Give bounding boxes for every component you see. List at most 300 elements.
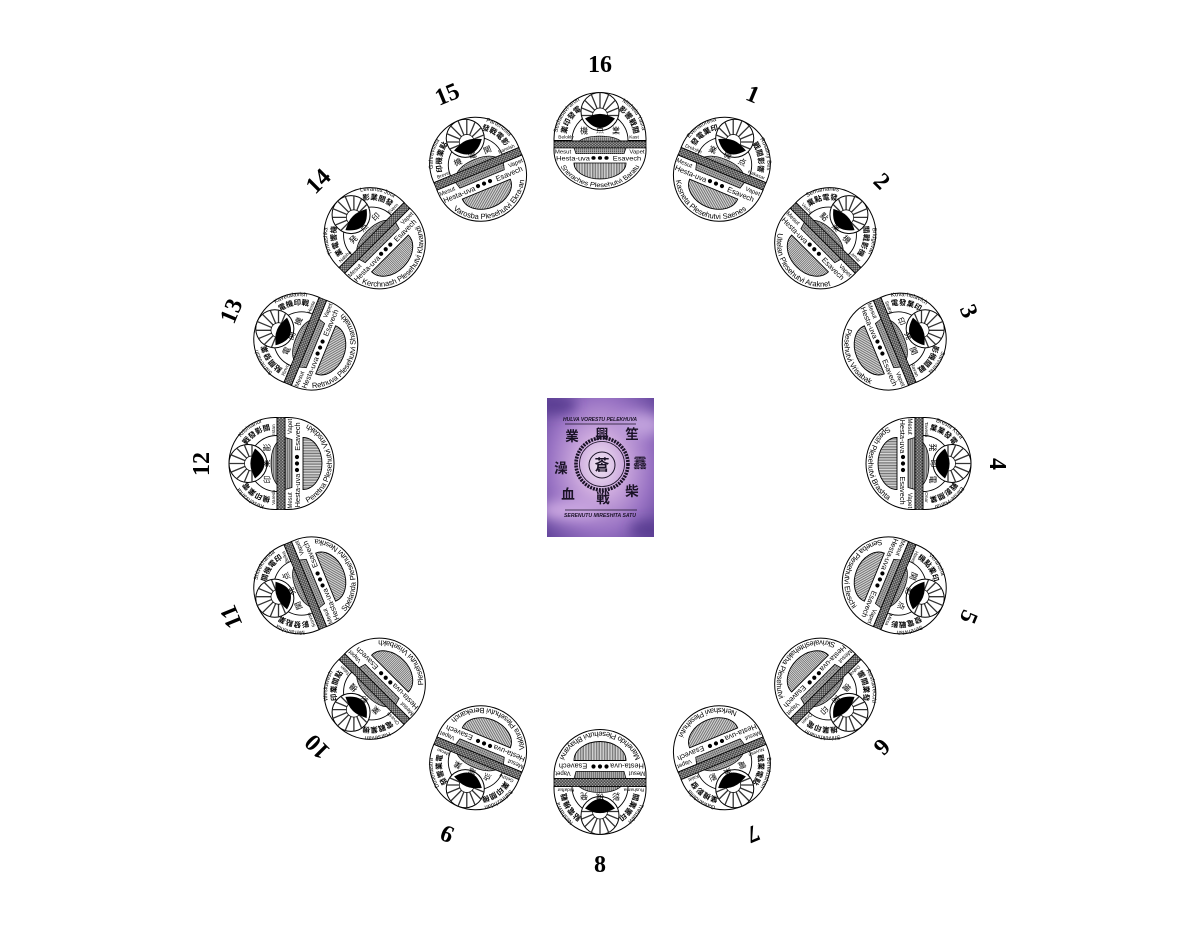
number 8: 8: [594, 852, 606, 878]
disc 11 upper half: 関: [293, 600, 305, 611]
disc 6 lower half: Esavech: [782, 683, 808, 710]
disc 4 upper half: Onar: [923, 492, 929, 503]
disc 11 lower half: Vapet: [295, 539, 306, 556]
disc 14 upper half: [293, 156, 404, 268]
disc 10 upper half: 印業關點: [317, 667, 356, 706]
disc 13 upper half: [224, 272, 319, 382]
disc 7 upper half: 戰業電點: [752, 754, 765, 786]
disc 4 lower half: Hesta-uva: [898, 420, 907, 454]
number 4: 4: [984, 458, 1010, 470]
disc 14 upper half: Nalsha: [338, 249, 353, 264]
disc 2 upper half: 關戰影機: [856, 226, 870, 257]
disc 7 lower half: Esavech: [676, 744, 706, 763]
disc 8 lower half: Manehdo Plesehutvi Bhayanvi: [558, 730, 642, 762]
disc 15 upper half: [409, 87, 519, 183]
disc 4 upper half: 業業發電: [930, 424, 958, 444]
number 6: 6: [868, 733, 895, 760]
disc 6 lower half: [774, 638, 862, 725]
disc 10 lower half: Vapet: [348, 648, 363, 663]
disc 14 lower half: Hesta-uva: [352, 253, 383, 284]
disc 6 upper half: 響關業發: [857, 670, 870, 701]
disc 11 upper half: 關機電印: [252, 552, 290, 585]
number 9: 9: [437, 819, 458, 847]
disc 14 upper half: 影業關發: [358, 180, 397, 219]
disc 6 lower half: Hesta-uva: [817, 643, 848, 674]
disc 11 lower half: Spelanda Plesehutvi Nesrika: [310, 527, 370, 615]
disc 10 lower half: [338, 638, 426, 725]
central purple emblem picture: HULVA VORESTU PELEKHUVA: [563, 417, 637, 423]
disc 1 lower half: Esavech: [726, 185, 756, 204]
disc 14 lower half: Vapet: [400, 211, 415, 226]
number 12: 12: [189, 452, 215, 476]
disc 6: [774, 638, 877, 740]
disc 11 lower half: [284, 536, 358, 630]
disc 8 upper half: [554, 786, 646, 835]
disc 11 lower half: Esavech: [301, 540, 320, 569]
disc 12 upper half: 機印業電: [240, 480, 271, 504]
disc 15 upper half: 印機業點: [425, 138, 459, 175]
disc 7 upper half: 影: [707, 771, 718, 783]
disc 1 upper half: 發電業印: [690, 124, 718, 146]
disc 2 upper half: Lamar: [848, 250, 862, 264]
disc 10 upper half: 影: [357, 693, 370, 706]
disc 3 upper half: [880, 292, 947, 383]
disc 12 upper half: 影: [262, 444, 272, 452]
disc 5 lower half: [842, 536, 916, 630]
disc 8 upper half: Neshavra: [555, 801, 575, 825]
disc 7 lower half: [672, 705, 767, 780]
disc 9 upper half: 業: [452, 759, 463, 771]
disc 10 upper half: Orvesh: [386, 710, 401, 726]
disc 3 upper half: 発: [902, 330, 914, 341]
disc 8 lower half: Mesut: [628, 770, 645, 776]
disc 10 lower half: Mesut: [400, 700, 416, 716]
disc 6 upper half: 関: [830, 693, 842, 705]
disc 13 upper half: Kavetalavish: [272, 282, 309, 315]
disc 12 lower half: Vapet: [288, 419, 294, 434]
disc 1 upper half: Hakasar: [747, 169, 766, 182]
disc 6 upper half: Reshavecchi: [866, 668, 877, 703]
number 3: 3: [954, 301, 982, 322]
disc 2 lower half: Ultelan Plesehutvi Araknet: [776, 234, 831, 287]
disc 16 upper half: 業印發電: [560, 106, 581, 134]
disc 11 upper half: 点: [281, 571, 292, 581]
disc 3 upper half: 影機關戰: [918, 346, 940, 374]
disc 8 upper half: 発: [580, 792, 588, 800]
number 14: 14: [301, 164, 336, 199]
disc 14 lower half: [335, 198, 444, 308]
disc 14 upper half: Tirmashka: [312, 224, 345, 257]
disc 16 upper half: Seshasavi-aron: [554, 98, 580, 132]
disc 2 upper half: 業點電發: [806, 194, 838, 207]
disc 3 lower half: [842, 296, 916, 391]
disc 13: [253, 292, 358, 391]
disc 3 upper half: Sedra: [883, 300, 894, 315]
disc 7 upper half: 業機影發: [690, 781, 718, 803]
disc 5 lower half: Seneba Plesehutvi Eleschi: [844, 540, 882, 609]
disc 4 lower half: Esavech: [898, 476, 907, 505]
number 11: 11: [216, 601, 248, 632]
disc 4 lower half: Vapet: [906, 493, 912, 508]
disc 11: [253, 536, 358, 635]
disc 1 upper half: Evenatoresa: [686, 118, 716, 138]
disc 9 upper half: 点: [482, 771, 493, 782]
disc 5 upper half: Mirsa: [883, 613, 893, 627]
disc 8 lower half: Hesta-uva: [609, 762, 644, 770]
disc 4 lower half: Mesut: [906, 418, 912, 435]
disc 16: [554, 92, 646, 190]
disc 10 upper half: [323, 658, 405, 740]
disc 13 lower half: Esavech: [321, 308, 340, 338]
disc 1 upper half: 機: [722, 149, 733, 161]
disc 6 lower half: Skrivaleshtehakha Plesehutvi: [776, 640, 836, 699]
disc 16 upper half: 業: [612, 126, 620, 136]
disc 16 upper half: Mishelu Yasra: [622, 98, 644, 130]
disc 16 upper half: 機: [580, 126, 588, 136]
disc 16 lower half: [554, 136, 646, 190]
disc 9 upper half: Meran: [436, 746, 451, 757]
disc 12 upper half: Krishtanor: [238, 419, 263, 439]
disc 15 lower half: Hesta-uva: [442, 183, 477, 205]
disc 5 upper half: Hanel: [909, 550, 919, 564]
disc 2 lower half: Hesta-uva: [780, 215, 811, 246]
disc 4 lower half: Spesh Plesehutvi Brashta: [868, 428, 890, 500]
disc 5 lower half: Mesut: [894, 539, 906, 557]
disc 5 lower half: Vapet: [865, 608, 877, 624]
central purple emblem picture: 血: [561, 486, 575, 502]
disc 5 upper half: [880, 544, 947, 635]
disc 10 upper half: 機: [347, 681, 360, 694]
disc 11 upper half: Meravishta: [273, 614, 307, 644]
central purple emblem picture: 澡: [554, 461, 568, 476]
disc 2 upper half: Vesha: [800, 202, 814, 216]
disc 16 upper half: Belokly: [558, 134, 574, 140]
disc 13 upper half: Rinvo: [281, 363, 291, 377]
disc 12 lower half: Hesta-uva: [293, 473, 302, 507]
disc 7: [672, 705, 772, 810]
disc 11 lower half: Hesta-uva: [320, 586, 341, 622]
disc 16 upper half: 点: [596, 126, 604, 134]
disc 7 upper half: Berekushan: [760, 758, 772, 788]
disc 3 upper half: 電發業印: [891, 298, 922, 310]
disc 1 lower half: Mesut: [675, 158, 693, 170]
number 15: 15: [431, 78, 463, 112]
disc 13 lower half: Vapet: [323, 303, 335, 319]
disc 16 upper half: [554, 92, 646, 141]
disc 1 lower half: [672, 147, 767, 222]
disc 13 upper half: Sarnevash: [248, 347, 280, 376]
number 5: 5: [954, 606, 982, 627]
central purple emblem picture: 業: [565, 429, 579, 444]
disc 3 lower half: Esavech: [880, 358, 899, 387]
disc 5: [842, 536, 947, 635]
disc 1 lower half: Hesta-uva: [674, 163, 709, 185]
disc 14 upper half: 点: [358, 222, 370, 234]
disc 4 upper half: 印: [929, 460, 938, 468]
disc 8 upper half: 點電機戰: [559, 792, 583, 823]
disc 14 lower half: Mesut: [347, 263, 363, 279]
disc 14 upper half: 発: [348, 234, 360, 246]
disc 7 upper half: Nuvesh: [747, 746, 765, 758]
disc 12 upper half: 戰發影關: [241, 423, 271, 446]
disc 5 upper half: Verahsha: [930, 552, 944, 576]
central purple emblem picture: 興: [595, 427, 609, 442]
disc 15 lower half: Vapet: [508, 158, 524, 170]
disc 16 lower half: Sneraches Plesehutvi Baratu: [561, 165, 640, 188]
number 10: 10: [300, 729, 335, 764]
disc 5 lower half: Hesta-uva: [879, 537, 900, 572]
disc 4 lower half: [866, 417, 930, 510]
disc 12 upper half: Kesehvarita: [236, 486, 265, 509]
disc 9 lower half: Hesta-uva: [491, 742, 526, 764]
disc 12 lower half: Mesut: [288, 492, 294, 509]
disc 15 lower half: Esavech: [494, 164, 524, 183]
number 7: 7: [742, 819, 763, 847]
disc 7 upper half: Gawandelia: [688, 790, 715, 810]
disc 13 lower half: Retnuva Plesehutvi Sharmakh: [309, 310, 370, 401]
disc 12 lower half: Peretna Plesehutvi Vinsdakh: [304, 422, 334, 505]
disc 9 upper half: 發響業電: [425, 751, 459, 789]
disc 5 upper half: Serehvish: [896, 626, 923, 635]
disc 6 upper half: [795, 658, 877, 740]
disc 2 upper half: Semamanes: [806, 188, 839, 196]
disc 8: [554, 729, 646, 835]
disc 8 upper half: Nidaftar: [557, 786, 574, 792]
disc 8 lower half: [554, 729, 646, 793]
disc 9: [428, 705, 528, 810]
disc 14 upper half: Evern: [387, 202, 400, 215]
disc 13 upper half: 電機印戰: [275, 288, 312, 322]
disc 2 upper half: 機: [840, 233, 853, 246]
disc 10 upper half: Talan: [339, 664, 352, 676]
disc 13 upper half: 機: [292, 316, 305, 327]
disc 12 lower half: Esavech: [293, 422, 302, 451]
disc 4 upper half: Eleste-Hanar: [935, 486, 964, 508]
disc 6 upper half: 印: [818, 704, 830, 716]
disc 15 upper half: Partenusia: [484, 111, 513, 144]
disc 3 lower half: Hesta-uva: [859, 305, 880, 341]
disc 13 upper half: 電: [281, 346, 292, 356]
disc 12 upper half: [228, 417, 278, 510]
disc 16 upper half: Kast: [629, 134, 639, 140]
disc 9 lower half: Esavech: [444, 723, 474, 742]
disc 10 upper half: Harsevan: [362, 720, 393, 751]
disc 13 upper half: Hesta: [307, 300, 317, 314]
disc 11 upper half: 影發點業: [274, 605, 312, 639]
disc 10 lower half: Hesta-uva: [389, 681, 420, 712]
disc 15 lower half: Mesut: [439, 186, 457, 198]
disc 1: [672, 116, 772, 222]
disc 13 upper half: 點關發業: [252, 341, 290, 375]
disc 10 lower half: Esavech: [354, 645, 380, 672]
disc 5 upper half: 点: [895, 600, 907, 611]
disc 9 upper half: [428, 744, 520, 810]
central purple emblem picture: 柴: [625, 483, 639, 499]
disc 2 lower half: Mesut: [784, 211, 800, 227]
disc 14 upper half: Levanus Jota: [357, 173, 397, 213]
number 2: 2: [868, 168, 895, 195]
disc 9 upper half: 業印關機: [478, 774, 512, 811]
disc 2 upper half: 點: [818, 210, 831, 223]
disc 16 lower half: Mesut: [555, 150, 572, 156]
disc 9 upper half: 電: [467, 766, 478, 777]
disc 4 upper half: 発: [928, 444, 937, 452]
disc 11 lower half: Mesut: [323, 607, 335, 625]
disc 12 upper half: 業: [261, 460, 271, 468]
disc 15 upper half: 関: [482, 145, 493, 156]
disc 1 upper half: 戰關影響: [752, 141, 765, 173]
disc 3 upper half: Sarvesha: [928, 352, 945, 373]
disc 3 upper half: Kova-helavich: [891, 292, 928, 304]
disc 2 lower half: Vapet: [837, 264, 852, 279]
disc 11 upper half: Shivekhanda: [246, 548, 284, 583]
disc 8 upper half: Trestalvi: [627, 803, 644, 824]
disc 15 lower half: [432, 142, 541, 235]
disc 15 upper half: 機: [452, 156, 463, 168]
disc 12 lower half: [270, 417, 334, 510]
central purple emblem picture: 蒼: [594, 457, 610, 474]
disc 9 upper half: Duvenastra: [419, 755, 450, 790]
disc 6 lower half: Mesut: [837, 648, 853, 664]
number 13: 13: [215, 295, 249, 327]
disc 14 lower half: Esavech: [392, 217, 418, 244]
disc 1 upper half: [680, 116, 772, 184]
disc 7 lower half: Mesut: [743, 729, 761, 741]
disc 13 upper half: 関: [286, 330, 298, 341]
disc 2 upper half: [795, 187, 878, 268]
disc 12 upper half: Varesh: [271, 490, 277, 505]
disc 6 upper half: 機業印電: [806, 720, 838, 734]
central purple emblem picture: SERENUTU MIRESHITA SATU: [564, 513, 637, 519]
disc 1 upper half: Rosalny Bes: [760, 137, 772, 170]
central purple emblem picture: 䨺: [633, 456, 647, 471]
disc 7 lower half: Hesta-uva: [723, 722, 758, 744]
disc 14 upper half: 印: [370, 211, 382, 223]
disc 9 upper half: Gelsha: [498, 772, 515, 783]
disc 10: [323, 638, 426, 740]
disc 4 upper half: Tavesh: [923, 422, 929, 437]
disc 14 upper half: 業電響機: [317, 221, 356, 260]
disc 10 upper half: 業: [369, 704, 382, 717]
disc 4: [866, 417, 972, 510]
disc 5 upper half: 影: [902, 586, 915, 597]
disc 4 upper half: [922, 417, 972, 510]
disc 12 upper half: Istan: [271, 424, 277, 435]
central purple emblem picture: [547, 398, 654, 537]
disc 9 lower half: [433, 705, 528, 780]
disc 8 upper half: 影: [612, 792, 620, 802]
central purple emblem picture: 笙: [625, 426, 639, 442]
disc 9 lower half: Vapet: [439, 729, 456, 740]
disc 4 upper half: 電: [928, 476, 937, 484]
disc 9 lower half: Vakhra Plesehutvi Berekanch: [448, 693, 537, 754]
disc 12: [228, 417, 334, 510]
disc 12 upper half: 印: [263, 476, 272, 484]
disc 14: [293, 156, 445, 308]
disc 15 upper half: Banelsh: [497, 143, 516, 155]
disc 5 upper half: 發電戰影: [891, 616, 922, 628]
disc 11 upper half: 発: [286, 586, 298, 597]
disc 15 lower half: Varosba Plesehutvi Ekra-an: [450, 176, 535, 233]
disc 6 upper half: Orsen: [800, 711, 813, 725]
disc 13 lower half: [278, 295, 372, 404]
disc 6 upper half: Shivekhmarin: [805, 729, 840, 740]
disc 9 upper half: Sahrezhdan: [482, 782, 514, 817]
disc 2 upper half: Bridgevan: [868, 228, 878, 254]
disc 7 upper half: 電: [737, 759, 747, 770]
disc 6 upper half: 機: [840, 681, 853, 694]
disc 7 upper half: Kalat: [687, 773, 700, 783]
disc 3 upper half: Ravan: [909, 363, 920, 378]
disc 8 lower half: Vapet: [555, 770, 571, 776]
disc 2: [774, 187, 878, 290]
disc 2 upper half: 業: [830, 221, 843, 234]
disc 4 upper half: Bresta Kora: [936, 418, 962, 440]
disc 5 upper half: 関: [908, 571, 919, 581]
disc 16 upper half: 影響戰關: [619, 105, 640, 134]
disc 3 lower half: Plesehutvi Vrisabak: [844, 328, 872, 384]
disc 5 upper half: 機點業印: [918, 554, 940, 582]
disc 1 upper half: 業: [707, 144, 718, 156]
disc 6 lower half: Vapet: [785, 701, 800, 716]
disc 15: [409, 87, 541, 235]
disc 8 upper half: 機: [596, 792, 604, 802]
disc 16 lower half: Vapet: [629, 150, 645, 156]
disc 11 upper half: Belka: [281, 550, 291, 564]
disc 10 upper half: 電戰業機: [357, 708, 396, 747]
disc 3: [842, 292, 947, 391]
central purple emblem picture: 戦: [596, 490, 610, 506]
disc 1 lower half: Vapet: [744, 187, 761, 198]
disc 16 lower half: Esavech: [613, 156, 641, 162]
disc 1 upper half: 点: [737, 157, 747, 168]
disc 3 upper half: 印: [895, 316, 907, 327]
disc 10 upper half: Weskavesh: [311, 669, 346, 704]
disc 4 upper half: 戰影關業: [930, 482, 958, 503]
number 16: 16: [588, 52, 612, 78]
disc 13 lower half: Hesta-uva: [300, 355, 321, 390]
disc 2 lower half: Esavech: [820, 255, 846, 282]
disc 7 upper half: 業: [722, 766, 733, 778]
disc 16 lower half: Hesta-uva: [556, 156, 590, 162]
disc 15 upper half: 電: [467, 150, 478, 161]
disc 13 lower half: Mesut: [294, 370, 306, 388]
disc 15 upper half: 發戰電影: [478, 116, 512, 154]
disc 9 lower half: Mesut: [507, 757, 525, 769]
disc 5 lower half: Esavech: [860, 589, 879, 619]
disc 10 lower half: Plesehutvi Vrisebakh: [374, 628, 435, 690]
disc 15 upper half: Gahrevusta: [419, 136, 451, 171]
disc 14 lower half: Kerchnash Plesehutvi Klavandi: [358, 222, 442, 306]
disc 2 lower half: [774, 202, 862, 290]
disc 1 lower half: Kasneta Plesehutvi Saenes: [676, 180, 746, 220]
disc 7 upper half: [680, 744, 772, 810]
disc 1 upper half: Drekshe: [684, 143, 703, 156]
disc 8 upper half: Rushama: [623, 786, 644, 792]
disc 6 upper half: Dalva: [848, 664, 861, 677]
disc 15 upper half: Brevet: [436, 170, 452, 181]
disc 11 upper half: [253, 544, 320, 635]
disc 7 lower half: Vapet: [676, 757, 692, 769]
disc 3 lower half: Vapet: [894, 371, 905, 388]
number 1: 1: [742, 81, 763, 109]
disc 7 lower half: Nerkshavi Plesehutvi: [678, 708, 737, 738]
disc 11 upper half: Sorvan: [306, 611, 318, 628]
disc 8 lower half: Esavech: [559, 762, 587, 770]
disc 8 upper half: 關業響印: [617, 792, 641, 823]
disc 3 upper half: 関: [908, 346, 919, 356]
disc 3 lower half: Mesut: [865, 302, 877, 320]
